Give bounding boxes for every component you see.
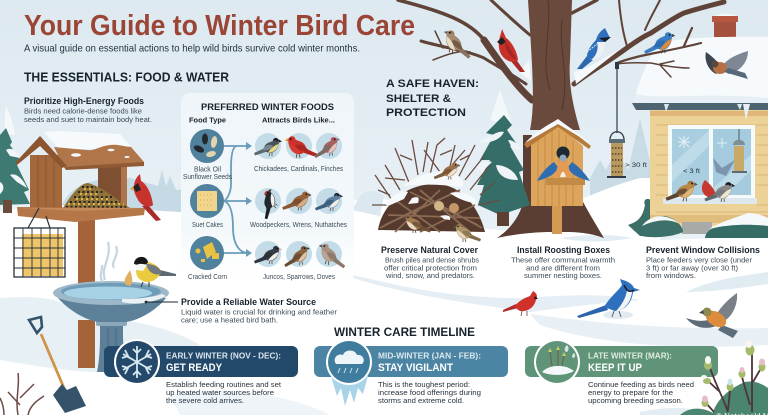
background: winter sky	[0, 0, 768, 240]
panel: late winter: LATE WINTER (MAR):	[588, 350, 672, 360]
icon: house with snowy roof and window	[628, 14, 768, 238]
panel: late winter: Continue feeding as birds need	[588, 380, 694, 389]
text block: install roosting boxes	[511, 245, 615, 280]
title: Your Guide to Winter Bird Care	[24, 10, 415, 42]
icon: heated bird bath	[53, 242, 176, 372]
text block: preserve natural cover: offer critical protection from	[384, 264, 477, 272]
text block: prevent window collisions: Prevent Window Collisions	[646, 245, 760, 255]
icon: suet cake	[190, 184, 224, 218]
icon: storm cloud badge	[326, 339, 372, 406]
icon: brush pile with birds	[372, 138, 500, 242]
panel: early winter: up heated water sources before	[166, 388, 274, 397]
text block: prevent window collisions	[646, 245, 760, 280]
callout: water source: Provide a Reliable Water Source	[181, 297, 316, 307]
icon: shrubs	[628, 199, 768, 238]
text block: preserve natural cover: Brush piles and dense shrubs	[385, 256, 479, 264]
panel: mid winter: increase food offerings during	[378, 388, 481, 397]
icon: shovel	[29, 317, 86, 413]
icon: suet cage	[14, 208, 65, 277]
callout: water source: Liquid water is crucial for drinking and feather	[181, 308, 338, 316]
panel: preferred winter foods	[181, 93, 354, 290]
icon: birds in tree	[438, 28, 748, 79]
panel: late winter: energy to prepare for the	[588, 388, 673, 397]
icon: window	[663, 125, 757, 204]
icon: ground cardinal	[503, 291, 538, 316]
panel: late winter	[525, 339, 718, 405]
text block: install roosting boxes: These offer communal warmth	[511, 256, 615, 264]
arrows: foods to birds	[224, 142, 252, 257]
panel: mid winter	[314, 339, 508, 406]
callout: water source: care; use a heated bird bath.	[181, 316, 278, 324]
panel: early winter: GET READY	[166, 362, 223, 374]
column heading: attracts birds: Attracts Birds Like...	[262, 116, 335, 124]
panel: early winter: the severe cold arrives.	[166, 396, 244, 405]
background: distant hills and snowy ground	[0, 118, 768, 415]
text block: prevent window collisions: Place feeders very close (under	[646, 256, 753, 264]
panel: late winter: KEEP IT UP	[588, 362, 642, 374]
panel: early winter: EARLY WINTER (NOV - DEC):	[166, 350, 281, 360]
icon: flying bird	[686, 293, 738, 338]
label: less than 3 ft: < 3 ft	[683, 168, 700, 175]
icon: ground blue jay	[577, 279, 640, 319]
icon: sunflower seeds	[190, 129, 224, 163]
birds at window	[666, 158, 735, 202]
text block: prevent window collisions: 3 ft) or far away (over 30 ft)	[646, 264, 738, 272]
panel: mid winter: MID-WINTER (JAN - FEB):	[378, 350, 481, 360]
text block: install roosting boxes: Install Roosting Boxes	[517, 245, 610, 255]
icon: left pine tree	[0, 106, 30, 215]
text block: preserve natural cover	[381, 245, 479, 280]
icon: bare twigs bottom left	[0, 373, 44, 415]
text block: preserve natural cover: Preserve Natural Cover	[381, 245, 479, 255]
text block: install roosting boxes: and are different from	[526, 264, 600, 272]
birds: chickadee, cardinal, finch	[254, 133, 342, 159]
icon: roosting box with bluebirds	[524, 119, 591, 234]
label: suet cakes: Suet Cakes	[192, 222, 223, 229]
icon: wooden platform feeder	[14, 131, 161, 368]
label: juncos, sparrows, doves: Juncos, Sparrows, Doves	[263, 274, 335, 281]
icon: big tree with branches	[398, 0, 724, 238]
text block: prioritize high-energy foods	[24, 96, 152, 124]
text block: install roosting boxes: summer nesting boxes.	[524, 271, 602, 280]
heading: a safe haven: PROTECTION	[386, 107, 466, 119]
icon: sprout badge	[534, 339, 580, 385]
heading: winter care timeline: WINTER CARE TIMELINE	[334, 325, 475, 339]
icon: cracked corn	[190, 236, 224, 270]
text block: preserve natural cover: wind, snow, and predators.	[385, 271, 475, 280]
label: black oil sunflower seeds: Sunflower Seeds	[183, 174, 232, 181]
panel: mid winter: This is the toughest period:	[378, 380, 470, 389]
label: cracked corn: Cracked Corn	[188, 274, 227, 281]
birds: junco, sparrow, dove	[254, 241, 350, 269]
birds: woodpecker, wren, nuthatch	[253, 187, 343, 220]
label: woodpeckers, wrens, nuthatches: Woodpeckers, Wrens, Nuthatches	[250, 222, 347, 229]
icon: chickadee at bath	[125, 257, 176, 287]
panel: early winter	[104, 339, 298, 405]
text block: prioritize high-energy foods: Prioritize High-Energy Foods	[24, 96, 144, 106]
label: black oil sunflower seeds	[183, 166, 232, 181]
callout: water source	[145, 297, 338, 324]
icon: steam	[101, 242, 117, 282]
label: black oil sunflower seeds: Black Oil	[194, 166, 221, 174]
panel heading: PREFERRED WINTER FOODS	[201, 102, 334, 112]
icon: flying bird near roof	[705, 51, 748, 79]
icon: window feeder	[732, 129, 747, 173]
panel: early winter: Establish feeding routines and set	[166, 380, 282, 389]
icon: middle pine tree	[473, 90, 530, 226]
heading: a safe haven: A SAFE HAVEN:	[386, 78, 479, 90]
icon: cardinal on feeder	[130, 174, 161, 221]
icon: chimney	[712, 14, 738, 37]
text block: prioritize high-energy foods: seeds and suet to maintain body heat.	[24, 115, 152, 124]
column heading: food type: Food Type	[189, 116, 226, 124]
subtitle: A visual guide on essential actions to help wild birds survive cold winter months.	[24, 42, 360, 54]
panel: mid winter: storms and extreme cold.	[378, 396, 464, 405]
panel: mid winter: STAY VIGILANT	[378, 362, 453, 374]
label: more than 30 ft: > 30 ft	[625, 162, 647, 169]
panel: late winter: upcoming breeding season.	[588, 396, 683, 405]
text block: prevent window collisions: from windows.	[646, 271, 696, 280]
heading: a safe haven: SHELTER &	[386, 93, 451, 105]
text block: prioritize high-energy foods: Birds need calorie-dense foods like	[24, 106, 142, 116]
icon: hanging tube feeder	[607, 62, 626, 178]
icon: spring buds and bush	[680, 340, 768, 415]
heading: the essentials: THE ESSENTIALS: FOOD & WATER	[24, 70, 229, 84]
icon: snowflake badge	[114, 339, 160, 385]
label: chickadees, cardinals, finches: Chickadees, Cardinals, Finches	[254, 166, 343, 173]
heading: a safe haven	[386, 78, 479, 119]
